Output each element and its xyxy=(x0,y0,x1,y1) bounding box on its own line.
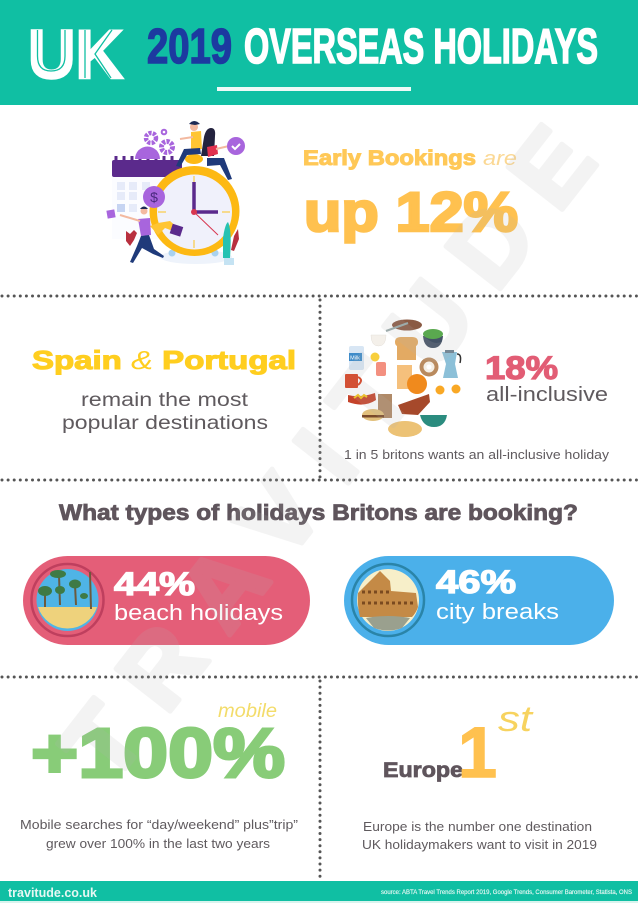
panel: europe xyxy=(362,698,597,852)
stat: 18% all-inclusive: all-inclusive xyxy=(486,384,608,406)
hot dog xyxy=(348,393,376,405)
stat: +100%: +100% xyxy=(31,714,285,792)
small check card xyxy=(106,209,116,219)
illustration: clock with people and calendar xyxy=(106,121,245,265)
bacon xyxy=(398,394,430,415)
photo: beach xyxy=(36,569,98,631)
stat: Europe 1st: Europe xyxy=(383,759,463,782)
stat: Europe 1st xyxy=(383,698,534,793)
pill: beach holidays xyxy=(23,556,310,645)
description xyxy=(20,818,298,851)
stat: 18% all-inclusive: 18% xyxy=(485,350,558,386)
dollar bubble: $ xyxy=(150,189,158,205)
coffee cup xyxy=(371,335,386,346)
description: Mobile searches for “day/weekend” plus”trip” xyxy=(20,818,298,832)
source: source: ABTA Travel Trends Report 2019, Google Trends, Consumer Barometer, Statista, ONS xyxy=(381,890,632,896)
knife and bread xyxy=(386,320,422,331)
description xyxy=(362,820,597,852)
label: mobile: mobile xyxy=(218,701,277,722)
orange juice and orange xyxy=(397,365,427,394)
watermark: TRAVITUDE: TRAVITUDE xyxy=(40,107,617,801)
description xyxy=(62,390,268,434)
stat: Europe 1st: st xyxy=(498,698,534,739)
footer band xyxy=(0,881,638,903)
description: Europe is the number one destination xyxy=(363,820,592,834)
stat: up 12%: up 12% xyxy=(304,180,518,243)
panel: spain and portugal xyxy=(32,345,296,434)
person seated with laptop xyxy=(176,121,202,167)
coffee pot xyxy=(442,350,461,378)
heading: Spain & Portugal xyxy=(32,345,296,375)
salad bowl xyxy=(423,329,443,348)
check bubble xyxy=(227,137,245,155)
mug xyxy=(345,374,361,388)
website: travitude.co.uk xyxy=(8,885,98,900)
running person xyxy=(120,206,183,263)
UK logo: UK xyxy=(28,16,123,93)
panel: mobile searches xyxy=(20,701,298,851)
description: UK holidaymakers want to visit in 2019 xyxy=(362,838,597,852)
photo: colosseum xyxy=(357,569,419,631)
caption: 1 in 5 britons: 1 in 5 britons wants an all-inclusive holiday xyxy=(344,448,610,462)
illustration: breakfast foods xyxy=(345,320,461,437)
pill: city breaks xyxy=(344,556,614,645)
clock body xyxy=(150,154,240,264)
heading: early bookings: Early Bookings xyxy=(303,147,476,170)
title underline xyxy=(217,87,411,91)
fried eggs xyxy=(436,384,460,394)
donut xyxy=(420,358,438,376)
toast xyxy=(395,337,418,360)
divider lines xyxy=(2,296,638,880)
gears xyxy=(135,130,172,159)
pill: city breaks: city breaks xyxy=(436,599,559,624)
dollar bubble xyxy=(143,186,165,208)
description: remain the most xyxy=(81,390,249,411)
stat: Europe 1st: 1 xyxy=(458,714,497,793)
lemon and juice glass xyxy=(370,352,386,376)
title: 2019 xyxy=(147,20,232,74)
milk: Milk xyxy=(350,356,360,362)
stat: 18% all-inclusive xyxy=(485,350,608,406)
iced coffee xyxy=(378,394,392,418)
calendar xyxy=(112,156,182,239)
pill: beach holidays: beach holidays xyxy=(114,600,283,625)
heading: early bookings: are xyxy=(483,148,517,170)
description: popular destinations xyxy=(62,413,268,434)
woman seated xyxy=(201,128,232,180)
description: grew over 100% in the last two years xyxy=(46,837,270,851)
potted plants xyxy=(126,222,239,265)
croissants xyxy=(388,421,422,437)
green bowl xyxy=(420,415,447,427)
label: 44% xyxy=(114,566,195,602)
burger xyxy=(362,409,384,421)
header band xyxy=(0,0,638,105)
heading: holiday types: What types of holidays Britons are booking? xyxy=(59,500,578,525)
label: 46% xyxy=(436,564,516,600)
